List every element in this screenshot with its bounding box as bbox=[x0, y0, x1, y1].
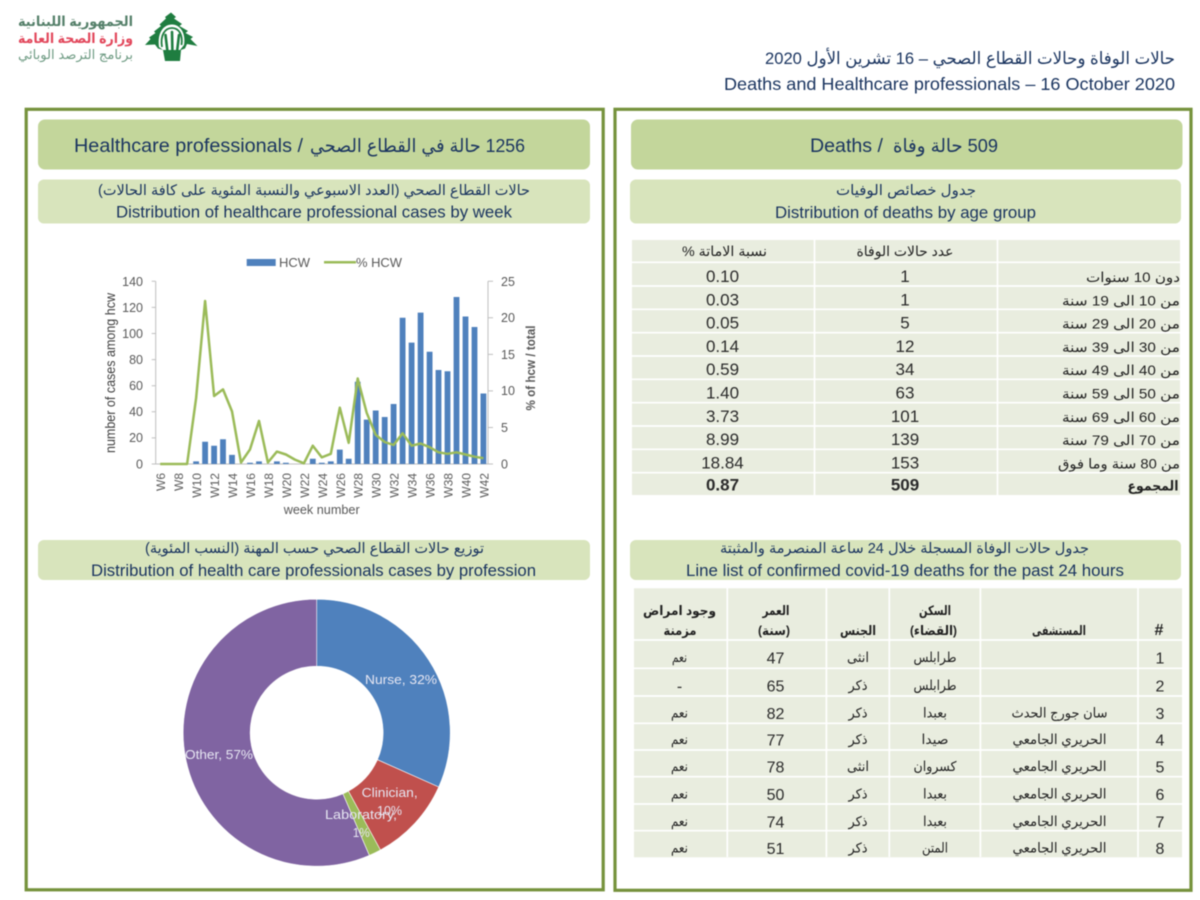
table header: المستشفى bbox=[1032, 623, 1086, 638]
row 7: نعم bbox=[671, 814, 688, 830]
row: 40 to 49: 34 bbox=[896, 360, 914, 379]
panel heading bbox=[631, 120, 1182, 170]
row: 60 to 69 bbox=[706, 407, 1180, 426]
row: 30 to 39: من 30 الى 39 سنة bbox=[1062, 340, 1180, 356]
section heading: deaths by age bbox=[630, 180, 1181, 224]
row 8: المتن bbox=[922, 840, 948, 856]
panel heading bbox=[38, 120, 590, 170]
row: total: 0.87 bbox=[706, 476, 739, 494]
row 6: 50 bbox=[767, 787, 784, 804]
row 7: ذكر bbox=[848, 814, 868, 830]
week labels: W8 bbox=[172, 473, 186, 491]
row 5: كسروان bbox=[914, 759, 957, 775]
section Arabic: حالات القطاع الصحي (العدد الاسبوعي والنسبة المئوية على كافة الحالات) bbox=[98, 183, 530, 199]
row: 20 to 29: من 20 الى 29 سنة bbox=[1062, 317, 1180, 333]
segment: nurse bbox=[317, 599, 450, 787]
table header: # bbox=[1155, 622, 1164, 639]
row 8: 8 bbox=[1156, 841, 1165, 858]
right axis tick labels: 0 bbox=[501, 458, 508, 472]
heading Arabic: 509 حالة وفاة bbox=[893, 135, 998, 157]
row 3: ذكر bbox=[848, 706, 868, 722]
row: 70 to 79: 139 bbox=[891, 430, 919, 449]
week labels: W18 bbox=[262, 473, 276, 498]
table: line list of deaths bbox=[634, 588, 1182, 858]
section bar bbox=[38, 540, 590, 580]
legend line percent bbox=[324, 261, 356, 264]
row: under 10: 1 bbox=[900, 267, 910, 286]
label: clinician bbox=[362, 785, 418, 818]
row 4: 77 bbox=[767, 732, 784, 750]
legend label HCW: HCW bbox=[279, 256, 310, 270]
row 6: نعم bbox=[671, 786, 688, 802]
row: total: 509 bbox=[891, 476, 919, 494]
row 4: 4 bbox=[1156, 732, 1165, 750]
label: other: Other, 57% bbox=[185, 747, 253, 762]
left axis tick labels: 0 bbox=[136, 458, 143, 472]
segment: other bbox=[183, 599, 369, 866]
panel frame bbox=[615, 109, 1191, 890]
row 2: - bbox=[677, 678, 682, 696]
row: 40 to 49: 0.59 bbox=[706, 360, 739, 379]
row: 20 to 29 bbox=[706, 314, 1180, 333]
row: 30 to 39: 0.14 bbox=[706, 337, 739, 356]
week labels: W6 bbox=[154, 473, 168, 491]
row 3: 82 bbox=[767, 706, 784, 723]
combo chart: weekly HCW cases and percent bbox=[103, 256, 538, 517]
section bar bbox=[630, 540, 1181, 580]
section bar bbox=[630, 180, 1181, 224]
row 8 bbox=[671, 840, 1165, 858]
row 8: الحريري الجامعي bbox=[1012, 840, 1106, 856]
row 5 bbox=[671, 759, 1165, 776]
section heading: cases by week bbox=[38, 180, 590, 224]
row: 80 and over: من 80 سنة وما فوق bbox=[1058, 456, 1180, 472]
row: 10 to 19: من 10 الى 19 سنة bbox=[1062, 293, 1180, 309]
right axis tick labels: 20 bbox=[501, 311, 515, 325]
table header: وجود امراض bbox=[643, 603, 716, 618]
row 5: 78 bbox=[767, 760, 784, 776]
table header: السكن bbox=[919, 603, 951, 618]
table header bbox=[643, 603, 1164, 639]
row 3: 3 bbox=[1156, 706, 1165, 723]
section English: Distribution of deaths by age group bbox=[775, 203, 1036, 222]
week labels: W38 bbox=[442, 473, 456, 498]
row: 60 to 69: من 60 الى 69 سنة bbox=[1062, 410, 1180, 426]
week labels: W20 bbox=[280, 473, 294, 498]
row: 70 to 79 bbox=[706, 430, 1180, 449]
row 4: ذكر bbox=[848, 732, 868, 748]
row: 80 and over bbox=[701, 453, 1180, 472]
row: under 10: 0.10 bbox=[706, 267, 739, 286]
row: under 10: دون 10 سنوات bbox=[1086, 270, 1180, 286]
table header: مزمنة bbox=[664, 623, 696, 638]
row: 80 and over: 18.84 bbox=[701, 453, 744, 472]
logo text: surveillance programme: برنامج الترصد الوبائي bbox=[18, 47, 133, 63]
row 7: 74 bbox=[767, 814, 784, 832]
right axis tick labels bbox=[501, 275, 515, 472]
left axis title: number of cases among hcw bbox=[103, 293, 118, 453]
donut chart: cases by profession bbox=[183, 599, 450, 866]
title in Arabic: حالات الوفاة وحالات القطاع الصحي – 16 تشرين الأول 2020 bbox=[765, 48, 1175, 69]
row: 50 to 59: 63 bbox=[896, 384, 914, 402]
table header bbox=[682, 243, 954, 260]
HCW bars bbox=[193, 297, 486, 464]
label: laboratory: Laboratory, bbox=[325, 807, 397, 822]
row 7: بعبدا bbox=[923, 814, 947, 829]
left axis tick labels bbox=[122, 275, 143, 472]
row 2 bbox=[677, 678, 1165, 696]
row: under 10 bbox=[706, 267, 1180, 286]
section bar bbox=[38, 180, 590, 224]
section heading: line list bbox=[630, 540, 1181, 580]
left axis tick labels: 100 bbox=[122, 327, 143, 341]
row: total bbox=[706, 476, 1178, 494]
left axis tick labels: 20 bbox=[129, 431, 143, 445]
row 1: نعم bbox=[672, 650, 687, 666]
left axis tick labels: 80 bbox=[129, 353, 143, 367]
table: deaths by age group bbox=[632, 240, 1180, 495]
table header: (سنة) bbox=[758, 623, 790, 638]
row 6: 6 bbox=[1156, 787, 1165, 804]
row: 40 to 49 bbox=[706, 360, 1180, 379]
week labels: W28 bbox=[352, 473, 366, 498]
section Arabic: توزيع حالات القطاع الصحي حسب المهنة (النسب المئوية) bbox=[145, 541, 484, 557]
heading bar bbox=[631, 120, 1182, 170]
row 6 bbox=[671, 786, 1165, 804]
row: 20 to 29: 0.05 bbox=[706, 314, 739, 333]
heading Arabic: 1256 حالة في القطاع الصحي bbox=[310, 135, 525, 157]
row: 10 to 19: 0.03 bbox=[706, 290, 739, 309]
row 1 bbox=[672, 650, 1165, 668]
row 6: ذكر bbox=[848, 786, 868, 802]
logo text: republic: الجمهورية اللبنانية bbox=[18, 13, 133, 30]
row 5: نعم bbox=[671, 759, 688, 775]
row 7 bbox=[671, 814, 1165, 832]
row 3: نعم bbox=[671, 706, 688, 722]
segment: clinician bbox=[348, 760, 439, 850]
row: 50 to 59 bbox=[706, 384, 1180, 402]
week labels: W22 bbox=[298, 473, 312, 498]
week labels: W12 bbox=[208, 473, 222, 498]
row 8: ذكر bbox=[848, 840, 868, 856]
row: 70 to 79: 8.99 bbox=[706, 430, 739, 449]
week labels bbox=[154, 473, 491, 498]
row: 10 to 19: 1 bbox=[900, 290, 910, 309]
legend label percent: % HCW bbox=[356, 256, 402, 270]
week labels: W16 bbox=[244, 473, 258, 498]
row 8: نعم bbox=[671, 840, 688, 856]
row 7: 7 bbox=[1156, 814, 1165, 832]
week labels: W34 bbox=[406, 473, 420, 498]
table header: (القضاء) bbox=[910, 623, 957, 638]
week labels: W24 bbox=[316, 473, 330, 498]
right axis title: % of hcw / total bbox=[523, 326, 538, 410]
x axis title: week number bbox=[283, 502, 360, 517]
section heading: cases by profession bbox=[38, 540, 590, 580]
ministry logo bbox=[18, 12, 198, 63]
panel: healthcare professionals bbox=[26, 109, 603, 890]
week labels: W14 bbox=[226, 473, 240, 498]
week labels: W10 bbox=[190, 473, 204, 498]
week labels: W36 bbox=[424, 473, 438, 498]
row 4: نعم bbox=[671, 732, 688, 748]
left axis tick labels: 60 bbox=[129, 379, 143, 393]
panel frame bbox=[26, 109, 603, 890]
section English: Line list of confirmed covid-19 deaths for the past 24 hours bbox=[686, 561, 1124, 580]
row: 70 to 79: من 70 الى 79 سنة bbox=[1062, 433, 1180, 449]
heading English: Healthcare professionals / bbox=[74, 135, 304, 157]
row 1: 47 bbox=[767, 650, 784, 668]
row 6: الحريري الجامعي bbox=[1012, 786, 1106, 802]
row 2: طرابلس bbox=[914, 678, 956, 694]
row 1: انثى bbox=[847, 650, 869, 665]
label: laboratory bbox=[325, 807, 397, 840]
section Arabic: جدول خصائص الوفيات bbox=[836, 183, 976, 199]
right axis tick labels: 15 bbox=[501, 348, 515, 362]
row 2: 2 bbox=[1156, 678, 1165, 696]
row 3: سان جورج الحدث bbox=[1012, 706, 1108, 722]
panel: deaths bbox=[615, 109, 1191, 890]
title in English: Deaths and Healthcare professionals – 16 October 2020 bbox=[724, 74, 1175, 94]
left axis tick labels: 120 bbox=[122, 301, 143, 315]
row: 50 to 59: من 50 الى 59 سنة bbox=[1062, 386, 1180, 402]
row 1: 1 bbox=[1156, 650, 1165, 668]
table header: الجنس bbox=[840, 623, 876, 638]
section Arabic: جدول حالات الوفاة المسجلة خلال 24 ساعة المنصرمة والمثبتة bbox=[720, 541, 1089, 557]
row 6: بعبدا bbox=[923, 786, 947, 802]
label: clinician: 10% bbox=[377, 803, 402, 818]
section English: Distribution of health care professionals cases by profession bbox=[91, 561, 536, 580]
week labels: W32 bbox=[388, 473, 402, 498]
heading bar bbox=[38, 120, 590, 170]
icon: cedar tree bbox=[145, 12, 198, 61]
row 5: 5 bbox=[1156, 760, 1165, 776]
segment: laboratory bbox=[343, 791, 380, 855]
left axis tick labels: 40 bbox=[129, 405, 143, 419]
row 8: 51 bbox=[767, 841, 784, 858]
row: 30 to 39 bbox=[706, 337, 1180, 356]
label: clinician: Clinician, bbox=[362, 785, 418, 800]
row 5: الحريري الجامعي bbox=[1012, 759, 1106, 775]
table header: عدد حالات الوفاة bbox=[856, 243, 954, 260]
week labels: W26 bbox=[334, 473, 348, 498]
right axis tick labels: 10 bbox=[501, 384, 515, 398]
label: laboratory: 1% bbox=[353, 825, 370, 840]
row 4: صيدا bbox=[922, 732, 948, 747]
report title bbox=[724, 48, 1175, 94]
heading English: Deaths / bbox=[810, 135, 884, 157]
legend swatch HCW bbox=[247, 259, 276, 266]
row 4 bbox=[671, 732, 1165, 750]
week labels: W40 bbox=[460, 473, 474, 498]
label: nurse: Nurse, 32% bbox=[365, 672, 437, 687]
logo text: ministry: وزارة الصحة العامة bbox=[18, 30, 133, 47]
row: 60 to 69: 101 bbox=[891, 407, 919, 426]
row 3 bbox=[671, 706, 1165, 723]
legend bbox=[247, 256, 402, 270]
row 5: انثى bbox=[847, 759, 869, 774]
row: 20 to 29: 5 bbox=[900, 314, 910, 333]
row: 40 to 49: من 40 الى 49 سنة bbox=[1062, 363, 1180, 379]
row: 60 to 69: 3.73 bbox=[706, 407, 739, 426]
row: 80 and over: 153 bbox=[891, 453, 919, 472]
left axis tick labels: 140 bbox=[122, 275, 143, 289]
percent HCW line bbox=[160, 301, 483, 464]
row: total: المجموع bbox=[1128, 478, 1178, 494]
table header: نسبة الاماتة % bbox=[682, 243, 767, 259]
row 7: الحريري الجامعي bbox=[1012, 814, 1106, 830]
row: 10 to 19 bbox=[706, 290, 1180, 309]
section English: Distribution of healthcare professional cases by week bbox=[116, 202, 512, 222]
row 4: الحريري الجامعي bbox=[1012, 732, 1106, 748]
row 2: ذكر bbox=[848, 678, 868, 694]
row 1: طرابلس bbox=[914, 650, 956, 666]
right axis tick labels: 25 bbox=[501, 275, 515, 289]
row 2: 65 bbox=[767, 678, 784, 696]
table header: العمر bbox=[762, 603, 790, 618]
week labels: W30 bbox=[370, 473, 384, 498]
right axis tick labels: 5 bbox=[501, 421, 508, 435]
week labels: W42 bbox=[477, 473, 491, 498]
row: 30 to 39: 12 bbox=[896, 337, 914, 356]
row: 50 to 59: 1.40 bbox=[706, 384, 739, 402]
row 3: بعبدا bbox=[923, 706, 947, 720]
